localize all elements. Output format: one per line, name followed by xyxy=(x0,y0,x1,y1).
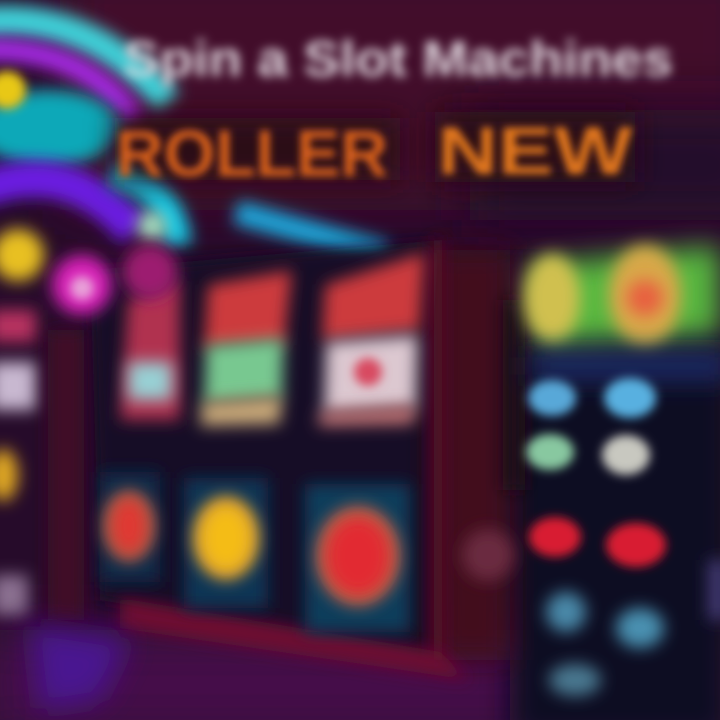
subtitle: ROLLER xyxy=(116,116,388,190)
subtitle xyxy=(115,112,635,190)
neon arcs top left xyxy=(0,21,178,245)
title: Spin a Slot Machines xyxy=(123,31,673,87)
right machine xyxy=(524,245,720,696)
upper reels xyxy=(120,252,425,426)
lower reels xyxy=(100,472,410,632)
left machine xyxy=(0,229,178,710)
subtitle: NEW xyxy=(438,113,633,189)
cyan banner xyxy=(236,212,386,254)
central slot machine cabinet xyxy=(90,240,525,680)
